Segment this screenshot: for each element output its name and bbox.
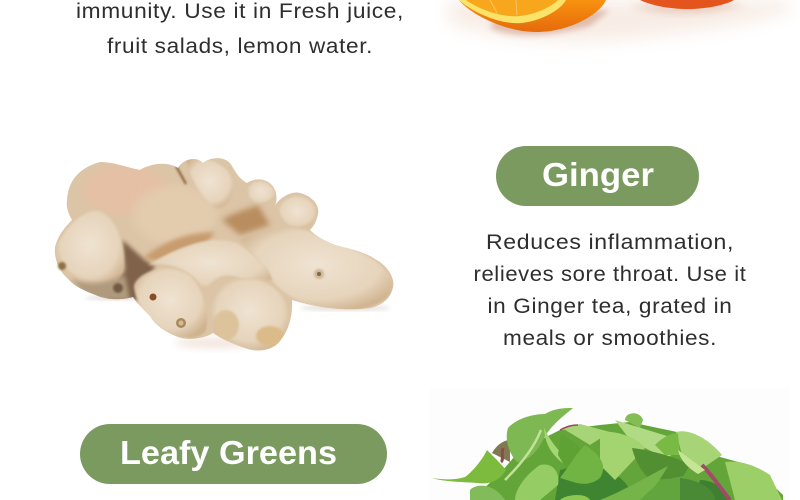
- leafy greens label: [80, 424, 387, 484]
- middle band: [148, 240, 272, 290]
- citrus description text: fruit salads, lemon water.: [107, 34, 373, 58]
- panel: leafy greens: [80, 388, 790, 500]
- lower left shadow: [70, 275, 130, 300]
- leafy greens label: Leafy Greens: [120, 434, 337, 471]
- icon: ginger root: [55, 158, 393, 350]
- ginger description text: relieves sore throat. Use it: [474, 262, 746, 286]
- upper knuckles: [186, 159, 234, 208]
- back leaves: [492, 440, 510, 462]
- panel: citrus text: [76, 0, 404, 58]
- ginger description text: Reduces inflammation,: [486, 230, 734, 254]
- icon: citrus fruits: [446, 0, 795, 42]
- second orange: [640, 0, 734, 9]
- panel: ginger: [55, 146, 746, 350]
- skin tones: [88, 165, 158, 209]
- mound base: [472, 422, 783, 500]
- ginger description text: meals or smoothies.: [503, 326, 717, 350]
- citrus description text: [76, 0, 404, 58]
- right root: [240, 227, 393, 310]
- front lobe 2: [210, 279, 289, 350]
- mid leaves: [558, 434, 588, 475]
- ginger description text: [474, 230, 746, 350]
- front lobe 1: [134, 268, 207, 338]
- dark crevices: [105, 240, 155, 300]
- ginger description text: in Ginger tea, grated in: [488, 294, 732, 318]
- purple stems: [560, 425, 578, 430]
- left lobe: [58, 210, 126, 280]
- eyes and buds: [58, 262, 324, 328]
- left outlier leaf: [432, 450, 506, 483]
- ginger label: Ginger: [542, 156, 654, 193]
- icon: salad leaves: [430, 388, 790, 500]
- large left leaf: [507, 408, 573, 462]
- bulb tip: [213, 310, 239, 340]
- ginger label: [496, 146, 699, 206]
- halved orange: [459, 0, 606, 32]
